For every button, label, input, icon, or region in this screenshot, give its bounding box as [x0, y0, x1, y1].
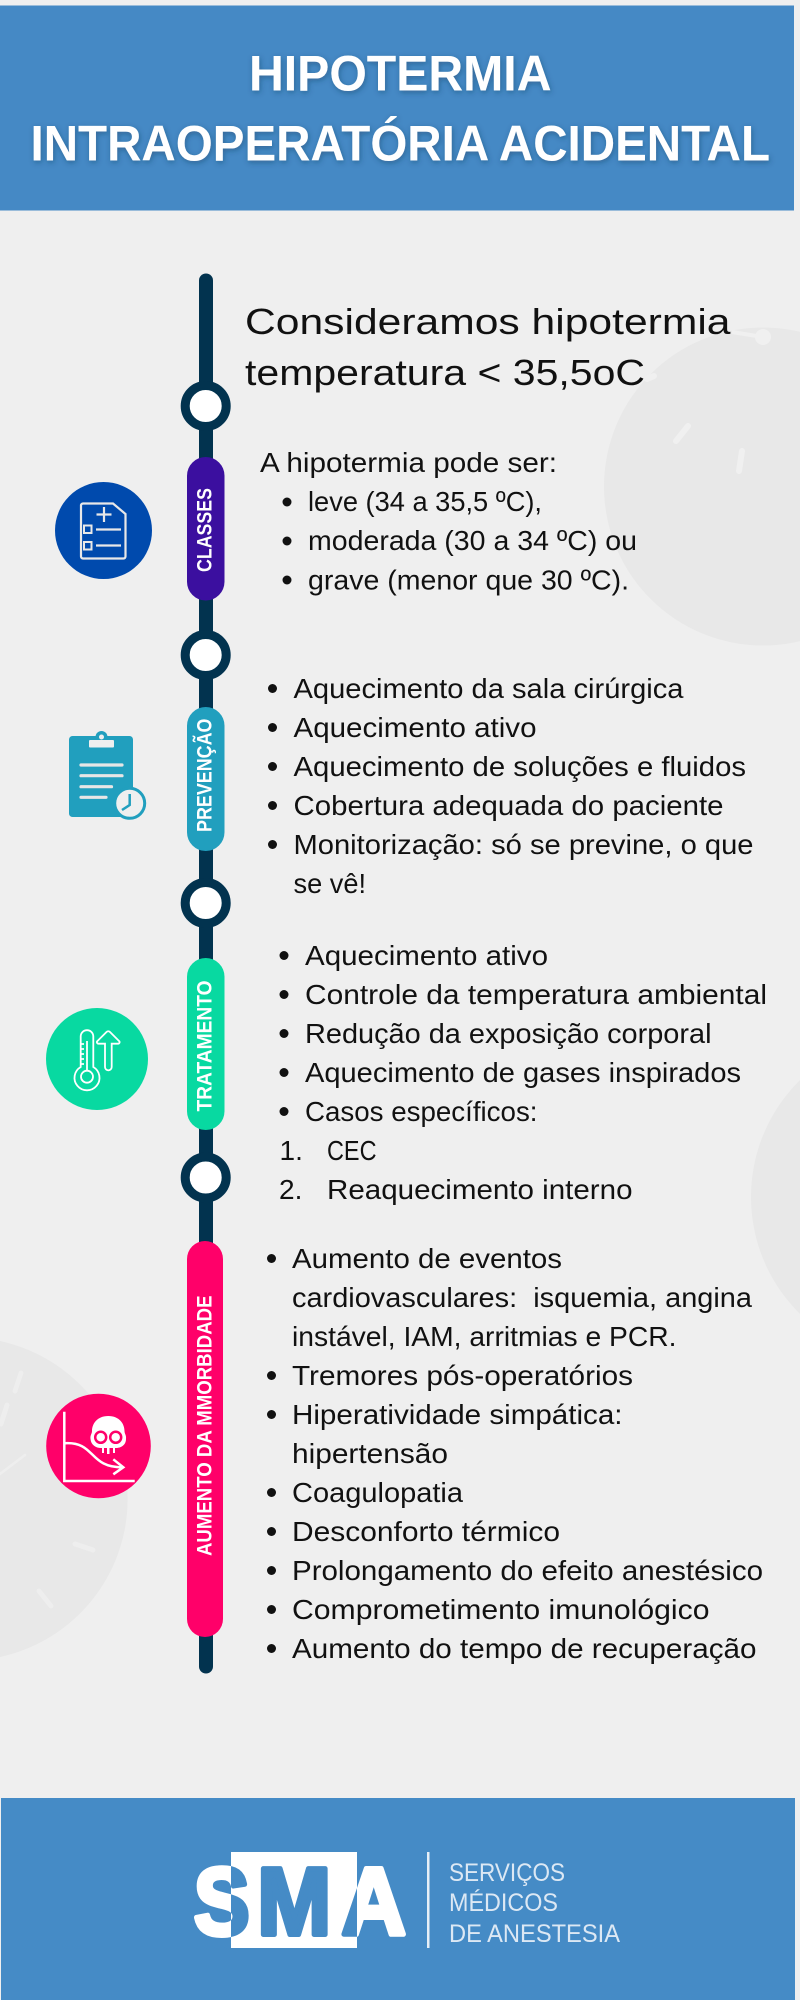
text: morbidade list: hipertensão — [292, 1438, 448, 1469]
logo: SMA: A — [342, 1848, 406, 1956]
footer banner — [1, 1798, 795, 2000]
text: morbidade list: instável, IAM, arritmias e PCR. — [292, 1321, 676, 1352]
logo: SMA: A — [342, 1848, 406, 1956]
icon: thermometer with arrow — [46, 1008, 148, 1110]
logo: SMA: M — [257, 1848, 331, 1956]
timeline spine — [199, 274, 213, 1674]
text: tratamento list — [279, 940, 767, 1205]
label pill: tratamento — [187, 958, 224, 1130]
intro heading: temperatura < 35,5oC — [245, 352, 645, 393]
label pill: aumento da morbidade: AUMENTO DA MMORBIDADE — [194, 1296, 216, 1556]
text: morbidade list: Comprometimento imunológico — [292, 1594, 710, 1625]
label pill: prevenção: PREVENÇÃO — [194, 718, 216, 832]
text: classes list — [260, 447, 637, 596]
panel: tratamento — [46, 940, 767, 1205]
label pill: classes — [187, 457, 224, 600]
timeline node 1 — [185, 386, 226, 426]
label pill: prevenção — [187, 707, 224, 851]
text: tratamento list: Reaquecimento interno — [327, 1174, 632, 1205]
text: tratamento list: CEC — [327, 1135, 376, 1166]
title — [30, 46, 770, 172]
panel: aumento da morbidade — [46, 1241, 763, 1664]
background clock: middle right — [751, 1033, 800, 1361]
text: morbidade list: Desconforto térmico — [292, 1516, 560, 1547]
background clock: top right — [604, 328, 800, 646]
panel: classes — [55, 447, 637, 600]
text: prevenção list: Monitorização: só se previne, o que — [294, 829, 754, 860]
title: INTRAOPERATÓRIA ACIDENTAL — [30, 116, 770, 172]
logo wordmark: DE ANESTESIA — [449, 1920, 620, 1948]
text: prevenção list — [268, 673, 754, 899]
icon: classes document — [55, 482, 152, 579]
icon: clipboard with clock — [69, 731, 145, 818]
logo wordmark — [449, 1859, 620, 1948]
label pill: tratamento: TRATAMENTO — [194, 980, 216, 1112]
text: tratamento list: Controle da temperatura ambiental — [305, 979, 767, 1010]
logo divider — [427, 1852, 430, 1948]
text: morbidade list: cardiovasculares: isquemia, angina — [292, 1282, 752, 1313]
text: tratamento list: Casos específicos: — [305, 1096, 538, 1127]
text: morbidade list: Tremores pós-operatórios — [292, 1360, 633, 1391]
text: classes list: A hipotermia pode ser: — [260, 447, 557, 478]
text: tratamento list: 2. — [279, 1174, 302, 1205]
intro heading: Consideramos hipotermia — [245, 301, 732, 342]
text: prevenção list: Cobertura adequada do paciente — [294, 790, 724, 821]
text: tratamento list: 1. — [280, 1135, 303, 1166]
text: morbidade list: Coagulopatia — [292, 1477, 463, 1508]
text: morbidade list: Aumento do tempo de recuperação — [292, 1633, 756, 1664]
text: tratamento list: Aquecimento de gases inspirados — [305, 1057, 741, 1088]
text: prevenção list: Aquecimento de soluções e fluidos — [294, 751, 746, 782]
text: prevenção list: Aquecimento ativo — [294, 712, 536, 743]
text: classes list: moderada (30 a 34 ºC) ou — [308, 525, 637, 556]
label pill: classes: CLASSES — [194, 488, 216, 572]
logo: SMA — [194, 1852, 406, 1948]
timeline node 2 — [185, 634, 226, 676]
header banner — [0, 6, 794, 210]
background clock: bottom left — [0, 1337, 128, 1661]
text: prevenção list: se vê! — [294, 868, 366, 899]
icon: skull with falling curve — [46, 1394, 151, 1498]
panel: prevenção — [69, 673, 754, 899]
text: tratamento list: Aquecimento ativo — [305, 940, 548, 971]
text: morbidade list — [267, 1243, 763, 1664]
text: prevenção list: Aquecimento da sala cirúrgica — [294, 673, 684, 704]
timeline node 3 — [185, 882, 226, 924]
text: classes list: leve (34 a 35,5 ºC), — [308, 486, 542, 517]
logo: SMA: S — [194, 1848, 250, 1956]
label pill: aumento da morbidade — [187, 1241, 223, 1637]
timeline node 4 — [185, 1157, 226, 1198]
title: HIPOTERMIA — [249, 46, 552, 102]
text: classes list: grave (menor que 30 ºC). — [308, 564, 629, 596]
text: morbidade list: Hiperatividade simpática: — [292, 1399, 622, 1430]
text: morbidade list: Aumento de eventos — [292, 1243, 562, 1274]
text: tratamento list: Redução da exposição corporal — [305, 1018, 712, 1049]
logo wordmark: MÉDICOS — [449, 1888, 558, 1917]
intro heading — [245, 301, 732, 393]
text: morbidade list: Prolongamento do efeito anestésico — [292, 1555, 763, 1586]
logo: SMA: S — [194, 1848, 250, 1956]
logo wordmark: SERVIÇOS — [449, 1859, 565, 1887]
